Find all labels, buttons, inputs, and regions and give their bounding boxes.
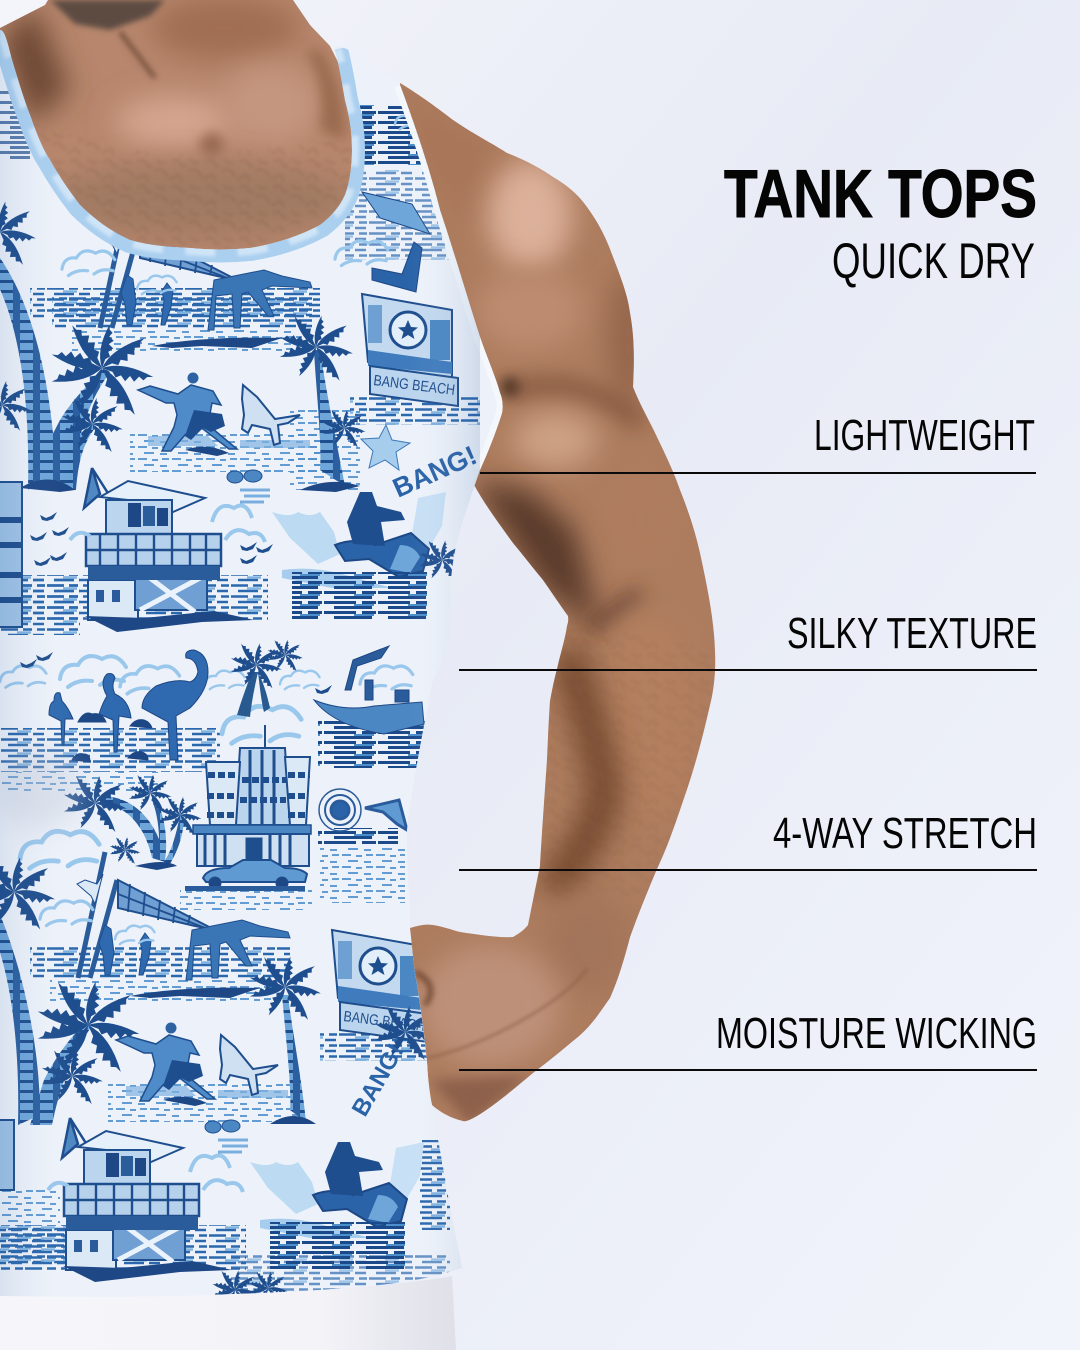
print: sea bands (0, 90, 455, 1295)
print: palm trees (0, 199, 465, 1125)
print: speedboat (314, 646, 424, 734)
print: upper sunbather and boat (362, 192, 430, 292)
print: jet ski (272, 492, 446, 620)
print: lower lifeguard station (320, 928, 427, 1061)
print: lower lifeguard hut (0, 1118, 246, 1282)
print: lower jet ski (250, 1142, 424, 1270)
print: lower brand lettering: BANG! (347, 1039, 410, 1121)
print: starfish (361, 425, 410, 470)
print: seagulls (20, 512, 332, 694)
model: arm and hand (390, 70, 730, 1130)
print: lower volleyball scene (30, 852, 290, 1002)
model: neck and chest (0, 0, 352, 250)
shirt base (0, 30, 503, 1105)
print: brand lettering: BANG! (388, 440, 481, 503)
print: side building left (0, 482, 22, 1190)
shirt trim and shading (0, 0, 503, 1310)
print: upper volleyball scene (52, 232, 313, 351)
print: flamingos (49, 650, 208, 762)
white shorts (0, 1276, 456, 1350)
print: lifeguard hut (18, 468, 268, 632)
print: lifeguard station (350, 294, 480, 425)
print: frisbee man and dog (130, 372, 320, 502)
print: sun and shark (319, 789, 407, 831)
tank top (0, 0, 520, 1314)
print: bottom palms (212, 1270, 288, 1295)
print: art deco hotel (180, 725, 312, 910)
print: clouds (0, 111, 435, 868)
print: lower frisbee man and dog (108, 1022, 298, 1152)
